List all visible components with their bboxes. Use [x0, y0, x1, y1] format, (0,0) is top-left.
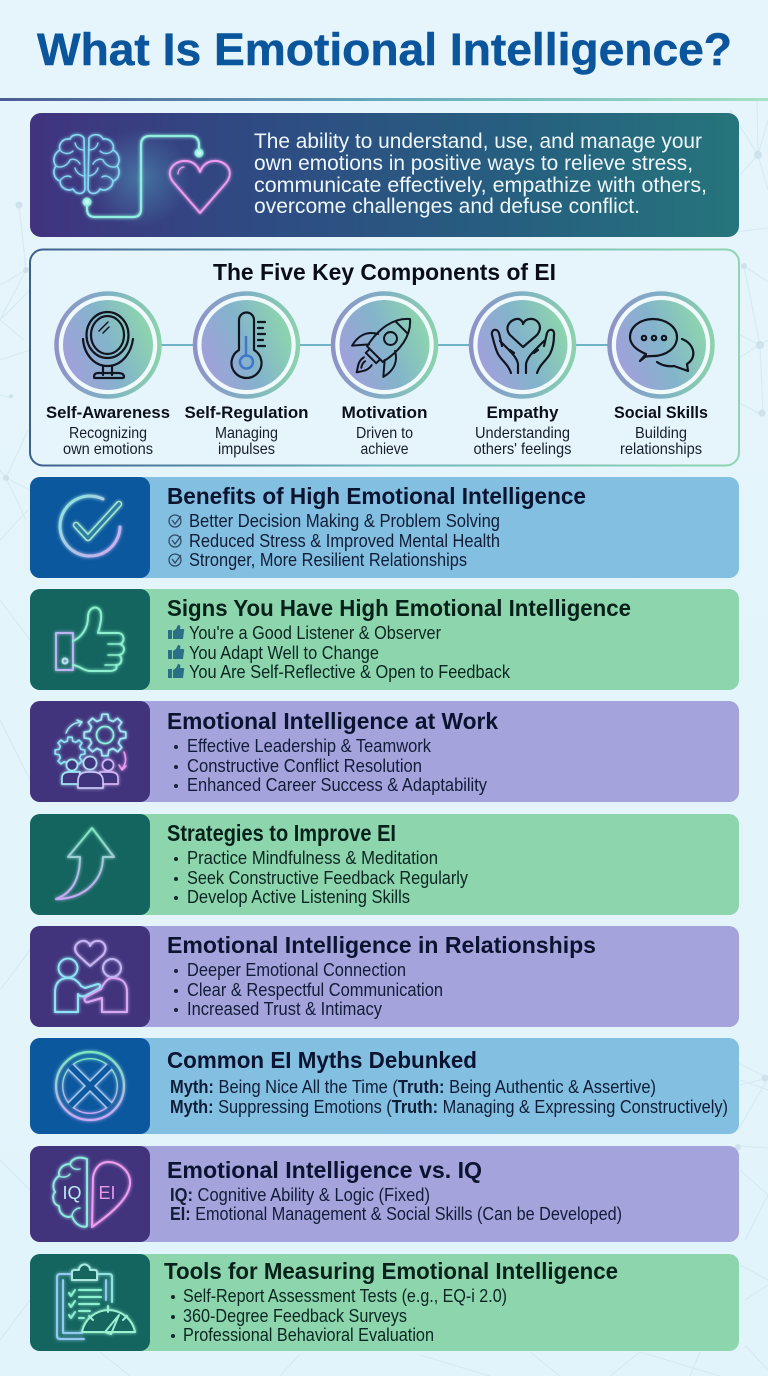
component: self-regulation: impulses [218, 441, 275, 458]
component: social skills: Social Skills [614, 403, 708, 422]
component: self-awareness: Recognizing [69, 425, 147, 442]
component: social skills: Building [635, 425, 687, 442]
comparison text: EI: Emotional Management & Social Skills (Can be Developed) [170, 1203, 622, 1224]
panel: at work: Emotional Intelligence at Work [167, 708, 498, 734]
icon: two people and heart [55, 941, 127, 1012]
bullet list [174, 959, 443, 1019]
icon: brain connected to heart [54, 135, 230, 217]
icon: brain and half heart: EI [98, 1183, 116, 1203]
panel: definition [30, 113, 739, 237]
bullet list: Enhanced Career Success & Adaptability [187, 774, 488, 795]
bullet list: Practice Mindfulness & Meditation [187, 847, 438, 868]
icon: rocket [340, 303, 426, 389]
bullet list [174, 847, 469, 907]
bullet list: Deeper Emotional Connection [187, 959, 406, 980]
bullet list: Constructive Conflict Resolution [187, 755, 422, 776]
bullet list: Increased Trust & Intimacy [187, 998, 383, 1019]
component: motivation: achieve [360, 441, 409, 458]
panel: relationships: Emotional Intelligence in Relationships [167, 932, 596, 958]
checklist [169, 510, 500, 570]
component: empathy [471, 294, 574, 458]
panel: EI vs IQ: Emotional Intelligence vs. IQ [167, 1157, 482, 1183]
component: motivation: Driven to [356, 425, 413, 442]
component: self-regulation: Managing [215, 425, 278, 442]
component: motivation: Motivation [342, 403, 428, 422]
bullet list [174, 735, 488, 795]
icon: brain and half heart: IQ [62, 1183, 82, 1203]
icon: heart in hands [492, 319, 554, 373]
panel: benefits: Benefits of High Emotional Intelligence [167, 483, 586, 509]
icon: crossed circle [56, 1052, 124, 1120]
component: self-awareness: own emotions [63, 441, 153, 458]
heading: five key components: The Five Key Components of EI [213, 259, 556, 285]
definition text: The ability to understand, use, and manage your [254, 130, 702, 153]
icon: speech bubbles [630, 319, 693, 371]
component: self-awareness [46, 294, 170, 458]
component: social skills [610, 294, 712, 458]
checklist: Better Decision Making & Problem Solving [189, 510, 500, 531]
bullet list: Effective Leadership & Teamwork [187, 735, 432, 756]
icon: thermometer [232, 312, 265, 378]
title: What Is Emotional Intelligence? [37, 24, 732, 75]
panel: five key components [30, 250, 739, 466]
panel: tools: Tools for Measuring Emotional Intelligence [164, 1258, 618, 1284]
thumbs list [168, 622, 511, 682]
component: self-regulation [184, 294, 308, 458]
panel: benefits [30, 477, 739, 578]
definition text: overcome challenges and defuse conflict. [254, 195, 640, 218]
comparison text [170, 1184, 622, 1224]
component: empathy: others' feelings [474, 441, 572, 458]
myths text: Myth: Suppressing Emotions (Truth: Managing & Expressing Constructively) [170, 1096, 728, 1117]
component: empathy: Empathy [486, 403, 559, 422]
component: motivation [333, 294, 436, 458]
definition text: own emotions in positive ways to relieve stress, [254, 152, 693, 175]
icon: upward arrow [56, 828, 114, 899]
panel: myths [30, 1038, 739, 1134]
panel: at work [30, 701, 739, 802]
icon: check circle [60, 496, 120, 556]
panel: signs: Signs You Have High Emotional Intelligence [167, 595, 631, 621]
component: self-regulation: Self-Regulation [184, 403, 308, 422]
bullet list: Professional Behavioral Evaluation [183, 1324, 434, 1345]
bullet list: Clear & Respectful Communication [187, 979, 443, 1000]
icon: mirror [83, 312, 133, 378]
comparison text: IQ: Cognitive Ability & Logic (Fixed) [170, 1184, 430, 1205]
panel: EI vs IQ [30, 1146, 739, 1242]
panel: relationships [30, 926, 739, 1027]
icon: brain and half heart [53, 1158, 130, 1227]
myths text [170, 1076, 728, 1117]
checklist: Stronger, More Resilient Relationships [189, 549, 467, 570]
bullet list: Develop Active Listening Skills [187, 886, 410, 907]
bullet list: Seek Constructive Feedback Regularly [187, 867, 469, 888]
component: empathy: Understanding [475, 425, 570, 442]
panel: strategies: Strategies to Improve EI [167, 820, 396, 846]
definition text: communicate effectively, empathize with others, [254, 174, 707, 197]
myths text: Myth: Being Nice All the Time (Truth: Being Authentic & Assertive) [170, 1076, 656, 1097]
icon: clipboard and gauge [57, 1265, 135, 1339]
icon: gears and team [55, 714, 126, 788]
component: self-awareness: Self-Awareness [46, 403, 170, 422]
panel: signs [30, 589, 739, 690]
definition text [254, 130, 707, 218]
bullet list: Self-Report Assessment Tests (e.g., EQ-i 2.0) [183, 1285, 507, 1306]
component: social skills: relationships [620, 441, 702, 458]
thumbs list: You Adapt Well to Change [189, 642, 379, 663]
icon: thumbs up [56, 608, 124, 671]
thumbs list: You Are Self-Reflective & Open to Feedback [189, 661, 511, 682]
checklist: Reduced Stress & Improved Mental Health [189, 530, 500, 551]
panel: tools [30, 1254, 739, 1351]
thumbs list: You're a Good Listener & Observer [189, 622, 441, 643]
bullet list [171, 1285, 507, 1345]
bullet list: 360-Degree Feedback Surveys [183, 1305, 407, 1326]
panel: myths: Common EI Myths Debunked [167, 1047, 477, 1073]
panel: strategies [30, 814, 739, 915]
